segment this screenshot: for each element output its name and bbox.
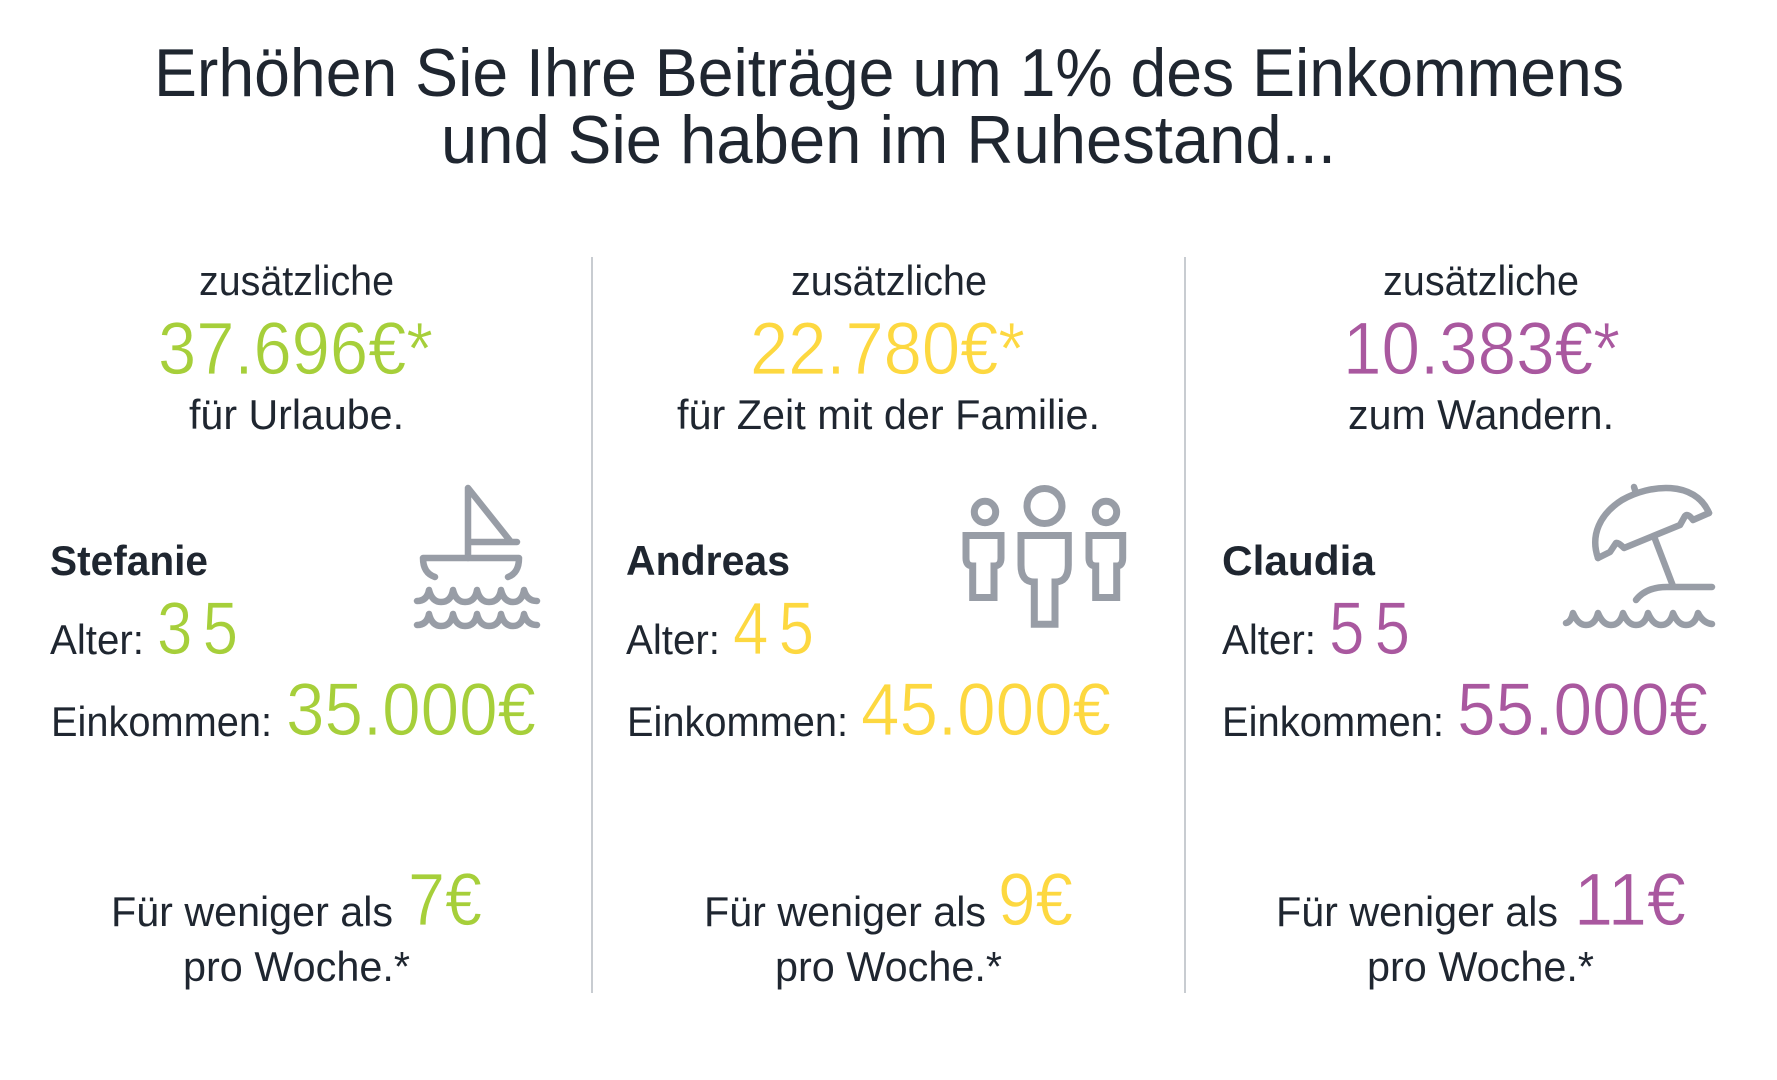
benefit: Wandern: zum Wandern. (1348, 391, 1614, 438)
weekly cost: 11€: 11€ (1574, 858, 1686, 941)
icon: sailboat (417, 488, 537, 626)
weekly cost: 9€: pro Woche.* (775, 943, 1002, 990)
benefit: Urlaube: zusätzliche (199, 257, 394, 304)
age: 45 (626, 588, 814, 670)
age: 55: Alter: (1222, 616, 1316, 663)
income: 45.000€: Einkommen: (627, 698, 848, 745)
weekly cost: 7€: 7€ (408, 858, 482, 941)
icon: beach umbrella (1566, 487, 1712, 625)
weekly cost: 9€: Für weniger als (704, 888, 986, 935)
benefit: Wandern: 10.383€* (1343, 307, 1620, 390)
income: 45.000€: 45.000€ (861, 668, 1111, 751)
age: 55 (1222, 588, 1410, 670)
title: und Sie haben im Ruhestand... (441, 102, 1336, 178)
weekly cost: 11€: pro Woche.* (1367, 943, 1594, 990)
income: 35.000€: Einkommen: (51, 698, 272, 745)
benefit: Familie: für Zeit mit der Familie. (677, 391, 1100, 438)
icon: family (966, 488, 1123, 624)
income: 55.000€ (1222, 668, 1708, 751)
benefit: Urlaube (158, 257, 433, 438)
title: Erhöhen Sie Ihre Beiträge um 1% des Einkommens (154, 35, 1624, 111)
benefit: Wandern (1343, 257, 1620, 438)
panel: Claudia (1222, 257, 1712, 990)
title (154, 35, 1624, 178)
income: 35.000€: 35.000€ (286, 668, 536, 751)
age: 35: 35 (157, 588, 238, 670)
income: 45.000€ (627, 668, 1111, 751)
weekly cost: 7€ (111, 858, 482, 990)
benefit: Urlaube: 37.696€* (158, 307, 433, 390)
weekly cost: 11€: Für weniger als (1276, 888, 1558, 935)
benefit: Familie: 22.780€* (750, 307, 1025, 390)
age: 35: Alter: (50, 616, 144, 663)
income: 35.000€ (51, 668, 536, 751)
benefit: Wandern: zusätzliche (1383, 257, 1579, 304)
income: 55.000€: Einkommen: (1222, 698, 1444, 745)
age: 45: 45 (733, 588, 814, 670)
weekly cost: 9€: 9€ (998, 858, 1073, 941)
benefit: Familie (677, 257, 1100, 438)
name: Claudia: Claudia (1222, 537, 1376, 584)
age: 45: Alter: (626, 616, 720, 663)
weekly cost: 7€: pro Woche.* (183, 943, 410, 990)
benefit: Familie: zusätzliche (791, 257, 987, 304)
weekly cost: 7€: Für weniger als (111, 888, 393, 935)
name: Stefanie: Stefanie (50, 537, 208, 584)
panel: Andreas (626, 257, 1123, 990)
age: 55: 55 (1329, 588, 1410, 670)
age: 35 (50, 588, 238, 670)
panel: Stefanie (50, 257, 537, 990)
income: 55.000€: 55.000€ (1457, 668, 1708, 751)
weekly cost: 9€ (704, 858, 1073, 990)
weekly cost: 11€ (1276, 858, 1686, 990)
benefit: Urlaube: für Urlaube. (189, 391, 404, 438)
name: Andreas: Andreas (626, 537, 790, 584)
